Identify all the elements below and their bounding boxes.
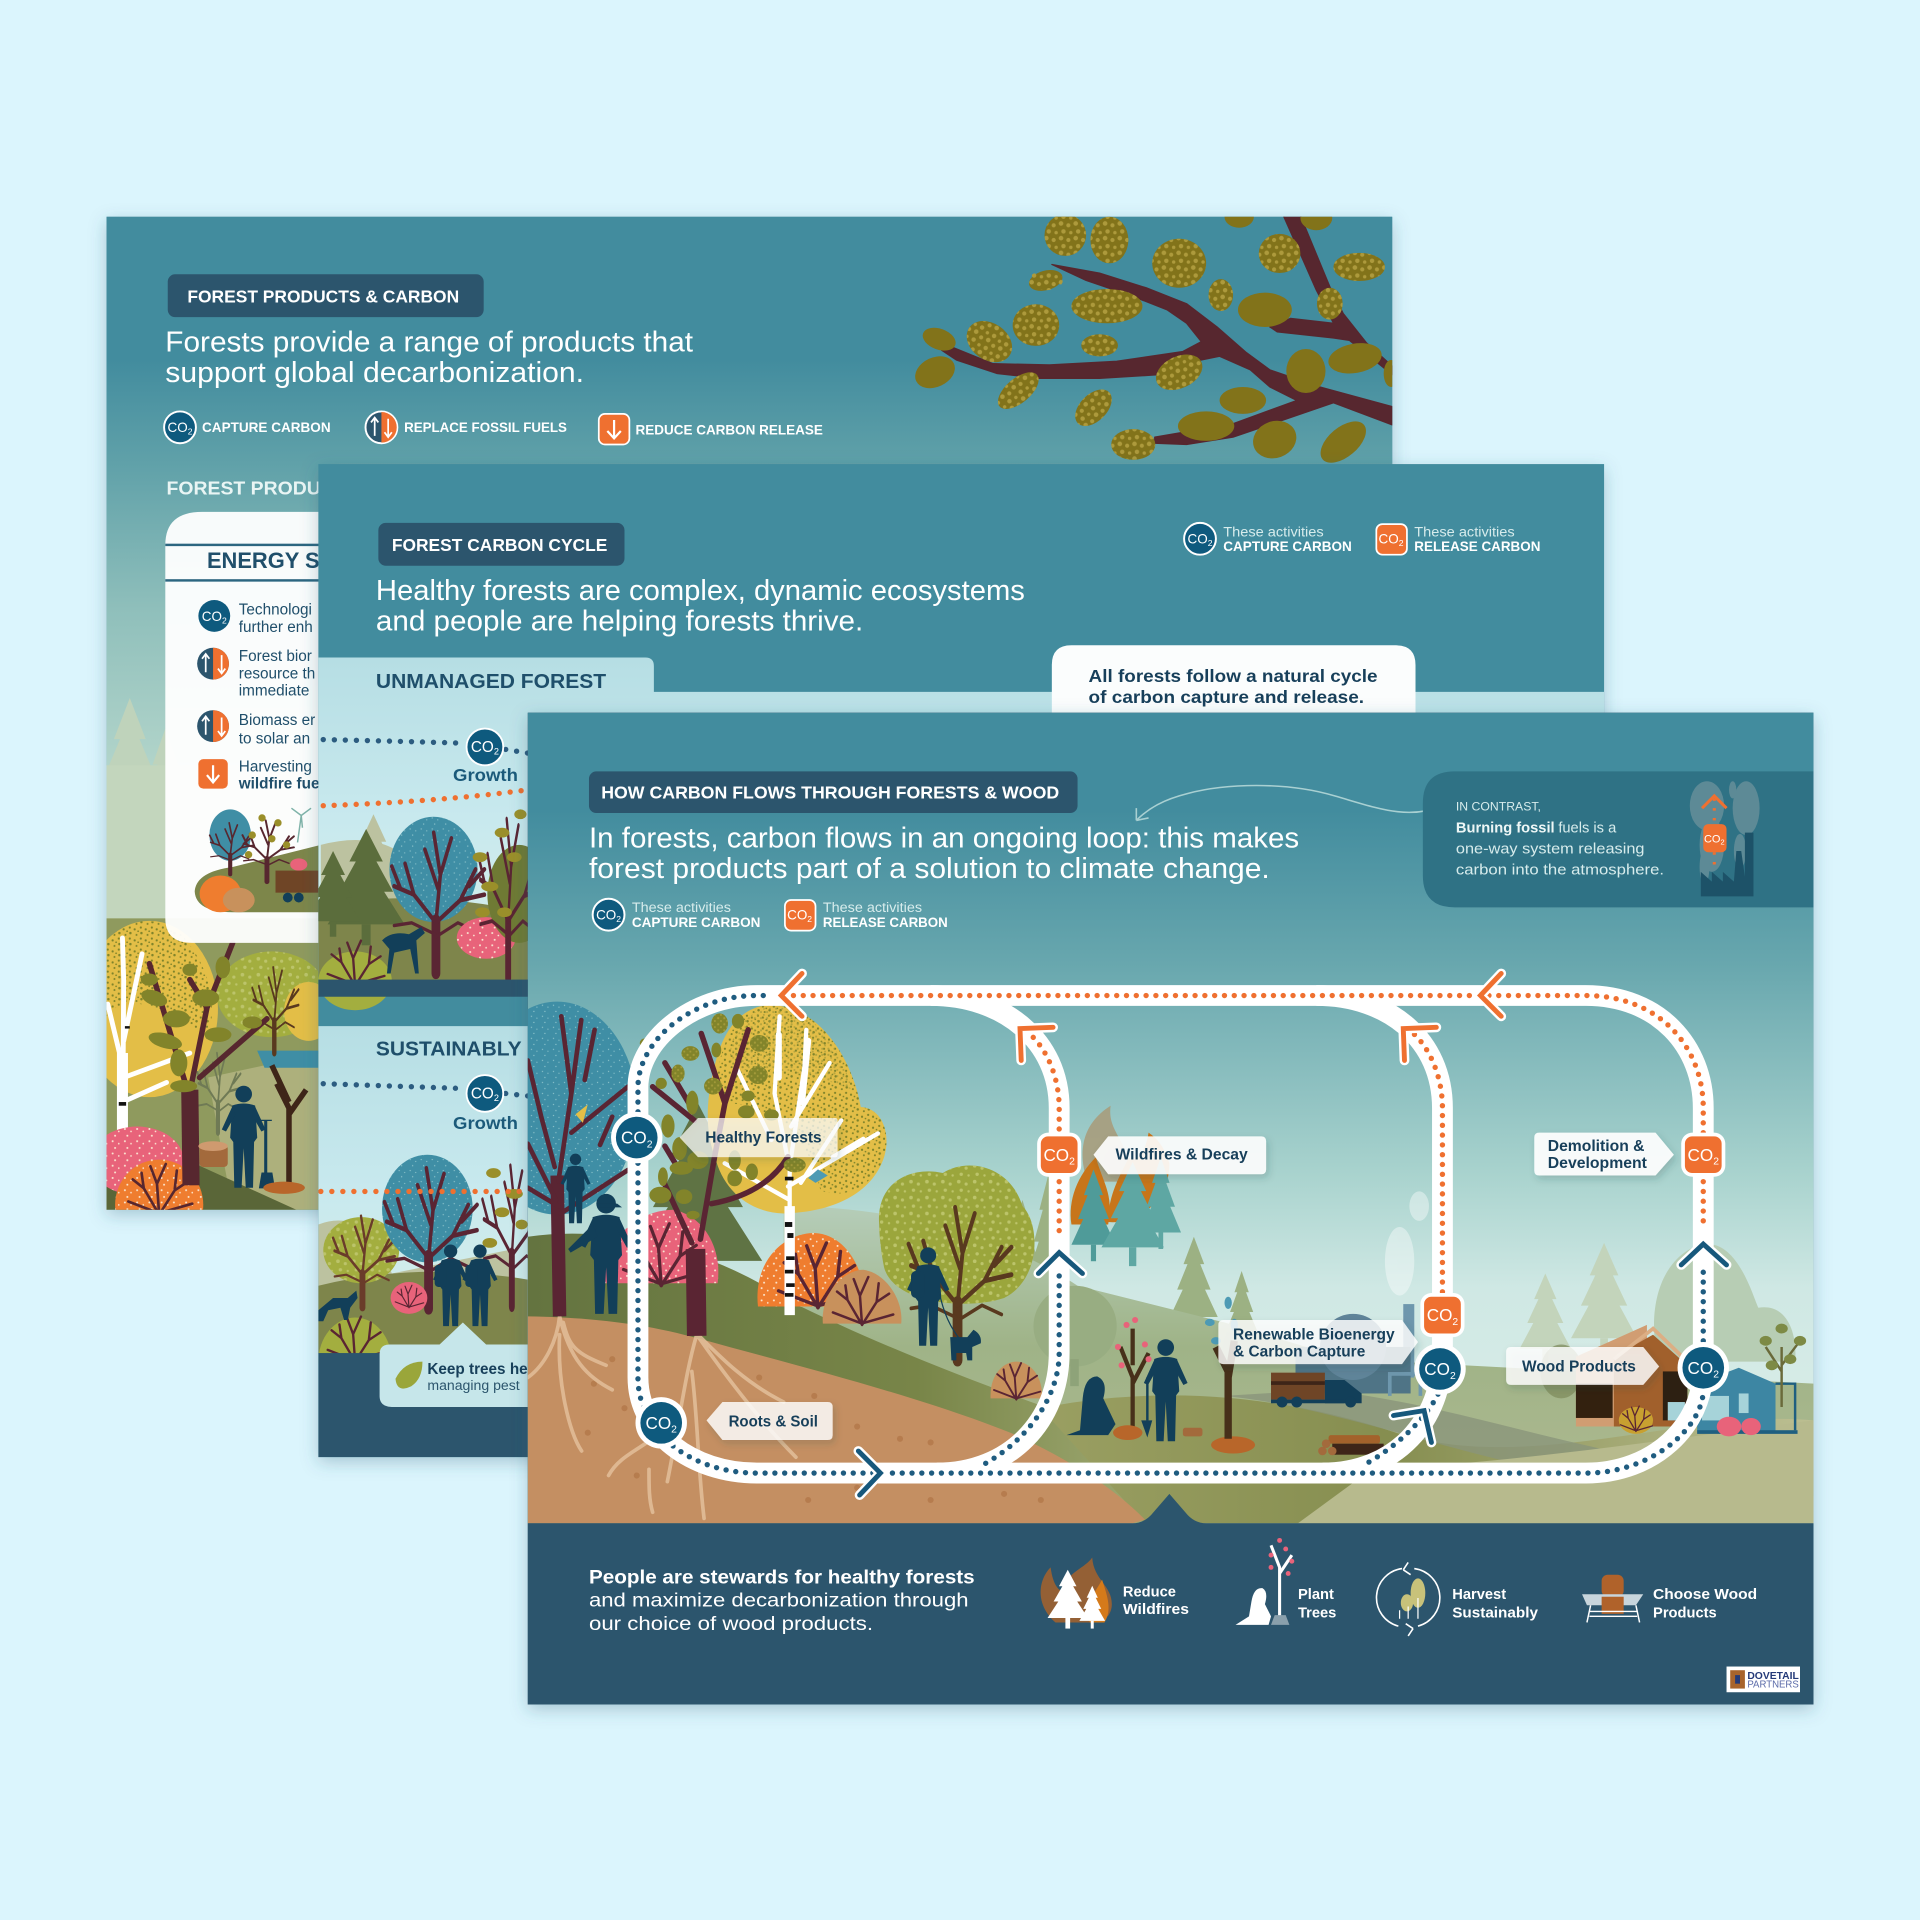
small tree and shrubs [1619,1324,1806,1436]
panel: forest carbon cycle [306,464,1604,1457]
headline: support global decarbonization. [165,357,584,389]
dark conifer [634,1103,762,1296]
label: plant trees: Trees [1298,1606,1336,1622]
node: roots and soil: 2 [671,1425,677,1436]
footer text: our choice of wood products. [589,1614,873,1635]
pale background tree [197,951,333,1133]
footer band [528,1494,1813,1704]
node: wildfires release: CO [1043,1145,1069,1165]
legend: CAPTURE CARBON [632,915,760,930]
section heading: FOREST PRODU [167,478,321,499]
callout: keep trees healthy [380,1322,539,1407]
panel: how carbon flows [478,713,1824,1704]
logo: dovetail partners: PARTNERS [1747,1679,1799,1690]
title pill: HOW CARBON FLOWS THROUGH FORESTS & WOOD [601,782,1059,802]
callout: in contrast [1423,771,1824,907]
label: choose wood products: Choose Wood [1653,1587,1757,1603]
icon: reduce wildfires [1041,1558,1112,1629]
node: wildfires release [1037,1133,1081,1177]
icon: plant trees [1236,1538,1294,1625]
legend: CO [596,908,616,923]
legend: REDUCE CARBON RELEASE [636,423,823,438]
card: energy: ENERGY S [207,548,320,573]
legend: These activities [1223,524,1324,539]
orange release dots [790,996,1703,1292]
callout: in contrast: carbon into the atmosphere. [1456,862,1664,878]
mini scene [195,808,321,912]
card: energy: Biomass er [239,712,315,729]
label: demolition and development: Demolition & [1548,1138,1644,1155]
label: plant trees: Plant [1298,1587,1334,1603]
label: renewable bioenergy: & Carbon Capture [1233,1344,1365,1361]
node: roots and soil: CO [645,1413,671,1433]
label: wildfires and decay [1093,1136,1266,1174]
label: demolition and development: Development [1548,1155,1647,1172]
icon: choose wood products [1582,1575,1643,1622]
soil [528,1316,1145,1523]
carbon loop [611,973,1729,1495]
legend [164,411,823,444]
blue carbon capture dots [638,996,1703,1473]
card: energy: wildfire fue [238,776,320,793]
headline: and people are helping forests thrive. [376,606,863,638]
node: bioenergy release: CO [1427,1305,1452,1325]
title pill [589,771,1078,813]
card: energy: further enh [239,619,313,636]
icon: factory: CO [1704,833,1721,845]
orange and tan shrubs [757,1177,901,1325]
callout: in contrast: one-way system releasing [1456,841,1644,857]
legend: CAPTURE CARBON [202,420,331,435]
footer text: and maximize decarbonization through [589,1591,969,1612]
footer text: People are stewards for healthy forests [589,1567,975,1588]
icon: factory: 2 [1721,837,1725,846]
callout: of carbon capture and release. [1089,687,1364,707]
card: energy: resource th [239,665,315,682]
node: growth: CO [471,739,494,756]
yellow birch tree [708,1005,887,1213]
fire and teal conifers [1071,1106,1181,1266]
section: unmanaged forest: UNMANAGED FOREST [376,671,607,693]
log pile [1318,1435,1384,1455]
label: harvest sustainably: Sustainably [1452,1606,1539,1622]
legend: These activities [1414,524,1515,539]
card: energy: Harvesting [239,758,312,775]
scene: sustainably managed [318,1154,528,1362]
legend: These activities [823,900,922,915]
dividers [318,980,528,997]
legend: 2 [1399,538,1404,548]
node: growth: 2 [494,1093,499,1103]
label: reduce wildfires: Reduce [1123,1585,1176,1601]
node: bioenergy capture: CO [1424,1359,1450,1379]
loop track [638,996,1703,1473]
legend: CO [168,420,188,435]
legend: RELEASE CARBON [823,915,948,930]
node: growth [453,729,518,785]
callout: All forests follow a natural cycle [1089,666,1378,686]
card: energy: 2 [222,615,227,625]
headline: In forests, carbon flows in an ongoing loop: this makes [589,822,1299,854]
node: roots and soil [636,1397,687,1449]
label: wood products [1506,1347,1659,1385]
node: demolition release [1681,1133,1725,1177]
background forest [93,698,321,1210]
legend: REPLACE FOSSIL FUELS [404,420,567,435]
scene: unmanaged forest [318,809,528,1010]
node: wildfires release: 2 [1069,1156,1075,1167]
label: roots and soil: Roots & Soil [729,1414,818,1431]
node: healthy forests [611,1112,662,1163]
legend [593,899,948,931]
label: choose wood products: Products [1653,1606,1717,1622]
legend: CAPTURE CARBON [1223,539,1352,554]
legend: CO [1379,532,1399,547]
title pill [378,523,624,566]
label: healthy forests: Healthy Forests [705,1129,822,1146]
legend: RELEASE CARBON [1414,539,1540,554]
label: healthy forests [680,1118,838,1157]
roots [528,1316,796,1518]
callout: keep trees healthy: Keep trees he [427,1361,528,1378]
legend: CO [787,908,807,923]
carbon flow lines [321,1084,528,1191]
background hills and trees [784,1176,1813,1523]
node: growth: CO [471,1085,494,1102]
callout: in contrast: fuels is a [1558,821,1617,837]
arrows [781,973,1727,1495]
node: demolition release: 2 [1713,1156,1719,1167]
callout: in contrast: IN CONTRAST, [1456,800,1541,814]
planters [1067,1297,1255,1453]
node: healthy forests: CO [621,1128,647,1148]
node: bioenergy capture [1414,1343,1466,1395]
arrow: swoosh to headline [1136,786,1442,820]
node: growth [453,1075,518,1133]
headline: Forests provide a range of products that [165,326,693,358]
node: growth: Growth [453,765,518,785]
legend: CO [1188,532,1208,547]
section: sustainably managed: SUSTAINABLY [376,1039,522,1061]
node: demolition release: CO [1688,1145,1713,1165]
legend: These activities [632,900,731,915]
section: sustainably managed [318,1026,528,1458]
maroon tree with leaves [640,1013,806,1336]
scene: landscape [478,1002,1813,1523]
callout: keep trees healthy: managing pest [427,1377,520,1393]
right hills [1041,1395,1813,1523]
title pill: FOREST CARBON CYCLE [392,535,607,555]
carbon flow lines [323,740,528,806]
section: unmanaged forest [306,645,1604,1010]
man silhouette [568,1194,632,1314]
node: bioenergy capture: 2 [1450,1371,1456,1382]
title pill [168,274,484,317]
label: renewable bioenergy: Renewable Bioenergy [1233,1327,1395,1344]
headline: forest products part of a solution to climate change. [589,853,1270,885]
legend: 2 [616,914,621,924]
olive tree [879,1166,1035,1360]
legend [1184,523,1540,555]
card: energy: Technologi [239,602,312,619]
node: bioenergy release [1420,1293,1464,1337]
node: bioenergy release: 2 [1452,1317,1458,1328]
illustration: branch with leaves [910,206,1398,471]
label: harvest sustainably: Harvest [1452,1587,1506,1603]
node: wood products [1678,1342,1729,1393]
card: energy: CO [202,609,222,624]
label: roots and soil [707,1402,833,1440]
card: energy: Forest bior [239,648,312,665]
node: healthy forests: 2 [647,1139,653,1150]
icon: harvest sustainably [1376,1562,1440,1636]
hiker with dog [907,1247,981,1360]
card: energy: immediate [239,683,309,700]
pink shrub [602,1210,718,1286]
headline: Healthy forests are complex, dynamic ecosystems [376,575,1025,607]
node: wood products: 2 [1713,1370,1719,1381]
callout: in contrast: Burning fossil [1456,821,1555,837]
bioenergy plant and truck [1271,1191,1429,1408]
legend: 2 [1208,538,1213,548]
panel: forest products and carbon [81,206,1398,1250]
legend: 2 [188,427,193,437]
card: energy [165,512,318,943]
node: growth: Growth [453,1113,518,1133]
logo: dovetail partners [1727,1667,1800,1692]
scene: birch, maroon tree and planter [106,920,318,1210]
callout [1052,645,1416,712]
label: wildfires and decay: Wildfires & Decay [1116,1147,1248,1164]
card: energy: to solar an [239,730,310,747]
houses [1540,1325,1798,1434]
legend: 2 [807,914,812,924]
label: wood products: Wood Products [1522,1358,1636,1375]
title pill: FOREST PRODUCTS & CARBON [187,286,459,306]
logo: dovetail partners: DOVETAIL [1747,1671,1799,1682]
icon: factory [1690,781,1760,896]
label: renewable bioenergy [1218,1320,1418,1364]
node: wood products: CO [1688,1358,1713,1378]
label: demolition and development [1534,1133,1674,1176]
small shrub [991,1362,1042,1400]
blue tree [478,1002,637,1316]
label: reduce wildfires: Wildfires [1123,1602,1189,1618]
node: growth: 2 [494,746,499,756]
forest hill [528,1234,1176,1523]
